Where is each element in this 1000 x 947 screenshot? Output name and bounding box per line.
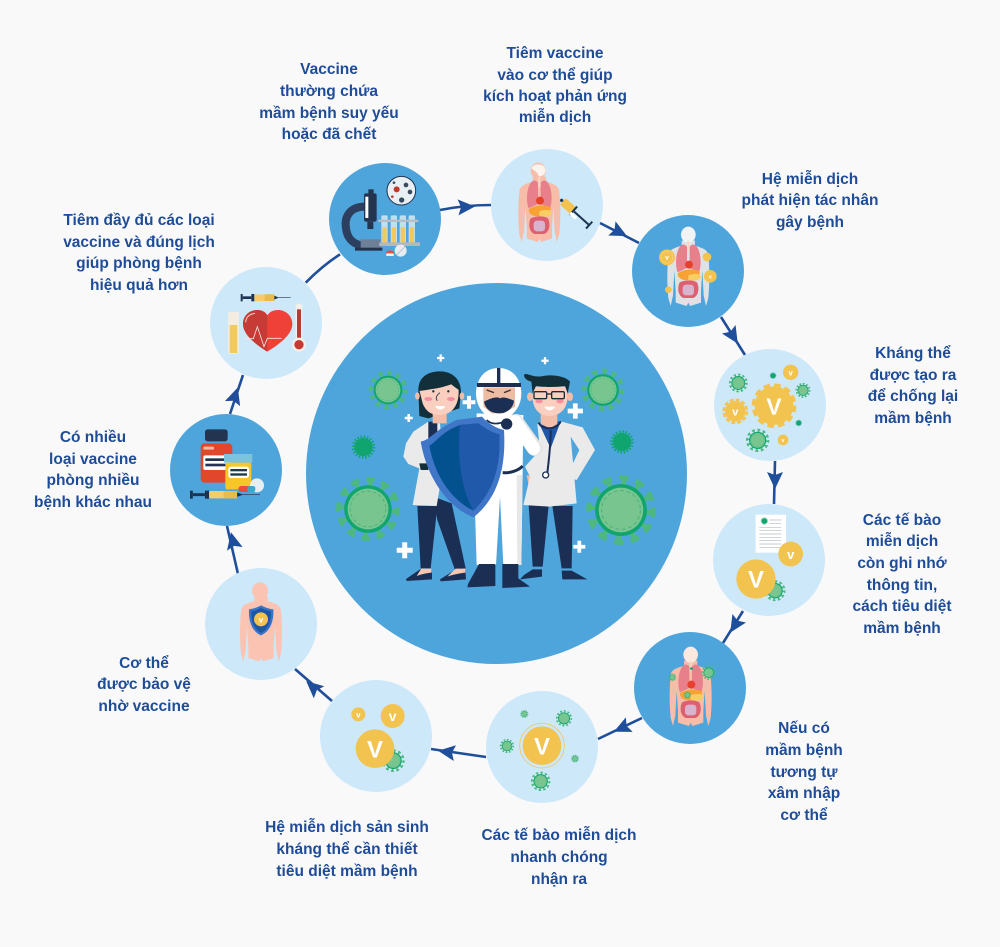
viruses around the team — [338, 370, 653, 542]
text: antibodies are produced: mầm bệnh — [874, 410, 952, 427]
step 4 icon: antibodies and germs: V — [766, 393, 782, 419]
main circle: doctors with shield — [306, 283, 687, 664]
text: antibodies are produced: để chống lại — [868, 388, 958, 405]
text: full and on-time vaccination: hiệu quả hơn — [90, 277, 188, 294]
text: full and on-time vaccination: Tiêm đầy đủ các loại — [63, 212, 215, 229]
text: immune cells quickly recognize: Các tế bào miễn dịch — [481, 827, 637, 844]
right male doctor with stethoscope — [520, 374, 595, 579]
text: immune cells quickly recognize: nhận ra — [531, 871, 587, 888]
text: full and on-time vaccination — [63, 212, 215, 294]
text: immune cells remember: mầm bệnh — [863, 620, 941, 637]
circular flow connector with arrows — [223, 199, 783, 761]
text: body is protected by vaccine: nhờ vaccine — [98, 698, 190, 715]
text: immune cells remember: thông tin, — [867, 577, 937, 594]
text: immune system produces antibodies — [265, 819, 429, 880]
text: immune cells remember: còn ghi nhớ — [857, 555, 948, 572]
text: many vaccine types: phòng nhiều — [47, 472, 139, 489]
step 5 icon: memory document and cells: v — [787, 547, 795, 562]
step 8 icon: antibodies destroying germs: v — [356, 710, 361, 719]
step 5 icon: memory document and cells: V — [748, 567, 764, 594]
text: immune system produces antibodies: Hệ miễn dịch sản sinh — [265, 819, 429, 836]
text: many vaccine types: loại vaccine — [49, 451, 137, 468]
step 4 icon: antibodies and germs: v — [782, 438, 785, 444]
step 3 icon: body with antigens — [632, 215, 744, 327]
text: injection activates immune response: Tiêm vaccine — [506, 45, 604, 62]
step 1 icon: microscope and test tubes — [329, 163, 441, 275]
text: antibodies are produced — [868, 345, 958, 427]
text: immune system detects pathogen — [742, 171, 878, 231]
text: immune system detects pathogen: phát hiện tác nhân — [742, 192, 878, 209]
text: vaccine contains weakened germs: Vaccine — [300, 61, 358, 78]
text: antibodies are produced: được tạo ra — [870, 367, 957, 384]
text: vaccine contains weakened germs: thường chứa — [280, 83, 378, 100]
text: immune system produces antibodies: kháng thể cần thiết — [276, 841, 418, 858]
step 4 icon: antibodies and germs: v — [732, 407, 739, 419]
text: injection activates immune response: vào cơ thể giúp — [497, 67, 613, 84]
text: immune system detects pathogen: gây bệnh — [776, 214, 844, 231]
step 11 icon: heart, thermometer, tube, syringe — [210, 267, 322, 379]
text: immune system detects pathogen: Hệ miễn dịch — [762, 171, 858, 188]
text: if similar germs invade — [765, 720, 843, 824]
text: if similar germs invade: mầm bệnh — [765, 742, 843, 759]
step 8 icon: antibodies destroying germs: v — [389, 708, 397, 724]
text: body is protected by vaccine: Cơ thể — [119, 655, 169, 672]
text: immune cells quickly recognize — [481, 827, 637, 888]
text: if similar germs invade: Nếu có — [778, 720, 830, 737]
text: immune cells remember: miễn dịch — [866, 533, 938, 550]
text: immune system produces antibodies: tiêu diệt mầm bệnh — [276, 863, 418, 880]
text: many vaccine types: bệnh khác nhau — [34, 494, 152, 511]
step 7 icon: immune cell recognizing germs — [486, 691, 598, 803]
text: vaccine contains weakened germs: hoặc đã chết — [282, 126, 376, 143]
white plus signs — [397, 354, 585, 558]
text: body is protected by vaccine — [97, 655, 191, 715]
text: injection activates immune response: miễn dịch — [519, 109, 591, 126]
text: immune cells remember: cách tiêu diệt — [852, 598, 952, 615]
step 8 icon: antibodies destroying germs — [320, 680, 432, 792]
step 6 icon: body invaded by germs — [634, 632, 746, 744]
step 5 icon: memory document and cells — [713, 504, 825, 616]
text: body is protected by vaccine: được bảo vệ — [97, 676, 191, 693]
text: full and on-time vaccination: giúp phòng bệnh — [76, 255, 202, 272]
doctors illustration — [403, 368, 595, 588]
step 4 icon: antibodies and germs — [714, 349, 826, 461]
step 9 icon: protected body with shield: v — [259, 615, 264, 624]
text: injection activates immune response — [483, 45, 627, 126]
woman doctor — [403, 371, 466, 581]
step 9 icon: protected body with shield — [205, 568, 317, 680]
central protective-suit figure — [467, 368, 530, 588]
step 3 icon: body with antigens: v — [709, 274, 712, 280]
text: vaccine contains weakened germs — [259, 61, 399, 143]
blue shield — [421, 417, 504, 517]
step 3 icon: body with antigens: v — [665, 255, 669, 262]
text: many vaccine types: Có nhiều — [60, 429, 126, 446]
step 7 icon: immune cell recognizing germs: V — [534, 733, 550, 760]
step 2 icon: body with syringe — [491, 149, 603, 261]
text: immune cells remember: Các tế bào — [863, 512, 941, 529]
step 10 icon: vaccine bottles and syringe — [170, 414, 282, 526]
step 4 icon: antibodies and germs: v — [788, 368, 793, 377]
text: immune cells quickly recognize: nhanh chóng — [510, 849, 608, 866]
text: antibodies are produced: Kháng thể — [875, 345, 951, 362]
step 8 icon: antibodies destroying germs: V — [367, 736, 383, 763]
arm and stethoscope over shield — [501, 418, 535, 448]
text: injection activates immune response: kích hoạt phản ứng — [483, 88, 627, 105]
text: full and on-time vaccination: vaccine và đúng lịch — [63, 234, 215, 251]
text: if similar germs invade: cơ thể — [780, 807, 828, 824]
text: many vaccine types — [34, 429, 152, 511]
text: if similar germs invade: tương tự — [770, 764, 838, 781]
text: vaccine contains weakened germs: mầm bệnh suy yếu — [259, 105, 399, 122]
text: if similar germs invade: xâm nhập — [768, 785, 840, 802]
text: immune cells remember — [852, 512, 952, 637]
